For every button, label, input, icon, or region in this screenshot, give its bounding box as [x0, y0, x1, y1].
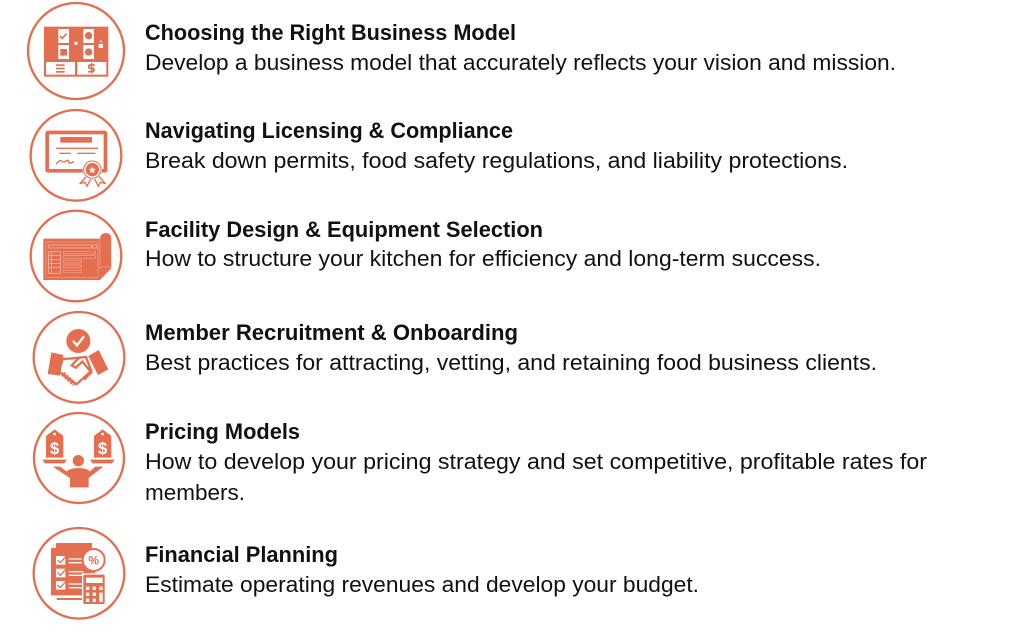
- heading and text: Navigating Licensing & Compliance: Navigating Licensing & Compliance: [145, 118, 513, 143]
- heading and text: Facility Design & Equipment Selection: Facility Design & Equipment Selection: [145, 217, 543, 242]
- heading and text: Member Recruitment & Onboarding: [145, 320, 877, 375]
- heading and text: Choosing the Right Business Model: Develop a business model that accurately reflects your vision and mission.: [145, 50, 896, 75]
- heading and text: Financial Planning: Financial Planning: [145, 542, 338, 567]
- icon: person balancing price tags: $: [98, 439, 108, 458]
- icon: financial checklist and calculator: %: [88, 554, 99, 568]
- heading and text: Pricing Models: members.: [145, 480, 245, 505]
- icon: person balancing price tags: $: [50, 439, 60, 458]
- icon: person balancing price tags: [34, 413, 124, 503]
- heading and text: Member Recruitment & Onboarding: Best practices for attracting, vetting, and retaining food business clients.: [145, 350, 877, 375]
- heading and text: Pricing Models: Pricing Models: [145, 419, 300, 444]
- heading and text: Facility Design & Equipment Selection: How to structure your kitchen for efficiency and long-term success.: [145, 246, 821, 271]
- heading and text: Navigating Licensing & Compliance: Break down permits, food safety regulations, and liability protections.: [145, 148, 848, 173]
- heading and text: Facility Design & Equipment Selection: [145, 217, 821, 271]
- icon: financial checklist and calculator: [34, 528, 124, 619]
- icon: business model canvas: [28, 3, 124, 99]
- heading and text: Financial Planning: [145, 542, 699, 597]
- heading and text: Navigating Licensing & Compliance: [145, 118, 848, 173]
- heading and text: Choosing the Right Business Model: [145, 20, 896, 75]
- heading and text: Choosing the Right Business Model: Choosing the Right Business Model: [145, 20, 516, 45]
- heading and text: Pricing Models: [145, 419, 927, 505]
- icon: kitchen blueprint: [31, 211, 121, 301]
- icon: certificate: [31, 110, 121, 201]
- heading and text: Financial Planning: Estimate operating revenues and develop your budget.: [145, 572, 699, 597]
- heading and text: Pricing Models: How to develop your pricing strategy and set competitive, profitable rates for: [145, 449, 927, 474]
- heading and text: Member Recruitment & Onboarding: Member Recruitment & Onboarding: [145, 320, 518, 345]
- icon: handshake with check: [34, 312, 124, 403]
